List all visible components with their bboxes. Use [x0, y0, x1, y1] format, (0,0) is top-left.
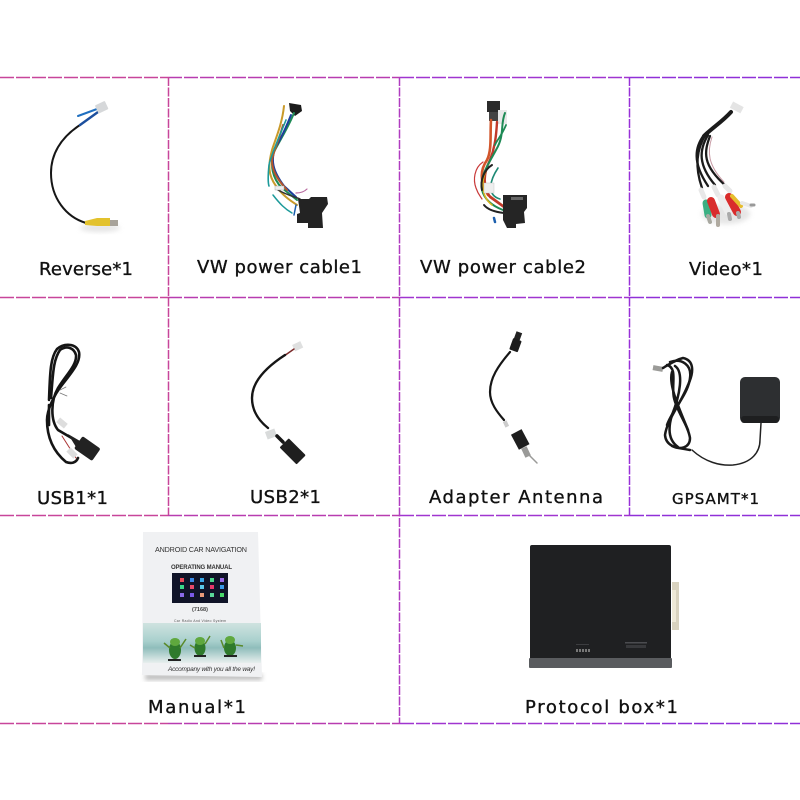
icon: VW power cable 1: [268, 103, 328, 228]
label: Reverse*1: Reverse*1: [39, 259, 133, 280]
label: VW power cable1: VW power cable1: [197, 257, 362, 278]
icon: GPS antenna: [653, 358, 780, 465]
icon: USB2 cable: [252, 341, 306, 464]
icon: manual booklet: ANDROID CAR NAVIGATION: [155, 545, 247, 554]
icon: manual booklet: [142, 532, 262, 680]
panel: USB1: [37, 345, 108, 509]
icon: manual booklet: OPERATING MANUAL: [171, 565, 232, 571]
panel: video cable: [689, 102, 763, 280]
icon: protocol box: [529, 545, 679, 668]
icon: VW power cable 2: [474, 101, 527, 228]
panel: GPS antenna: [653, 358, 780, 508]
panel: VW power cable 1: [197, 103, 362, 278]
panel: adapter antenna: [429, 331, 603, 508]
label: USB2*1: USB2*1: [250, 487, 321, 508]
panel: USB2: [250, 341, 321, 508]
label: Manual*1: Manual*1: [148, 697, 246, 718]
panel: protocol box: [525, 545, 679, 718]
label: VW power cable2: VW power cable2: [420, 257, 586, 278]
label: Adapter Antenna: Adapter Antenna: [429, 487, 603, 508]
icon: manual booklet: Car Radio And Video System: [174, 619, 226, 623]
panel: manual: [142, 532, 262, 718]
icon: adapter antenna: [490, 331, 537, 463]
label: Video*1: Video*1: [689, 259, 763, 280]
icon: manual booklet: Accompany with you all the way!: [167, 666, 255, 673]
icon: USB1 cable: [47, 345, 101, 463]
panel: reverse cable: [39, 101, 133, 280]
panel: VW power cable 2: [420, 101, 586, 278]
icon: manual booklet: (7168): [192, 607, 208, 613]
icon: reverse cable: [51, 101, 120, 232]
label: USB1*1: USB1*1: [37, 488, 108, 509]
icon: video RCA cable: [697, 102, 754, 225]
label: GPSAMT*1: GPSAMT*1: [672, 490, 759, 508]
label: Protocol box*1: Protocol box*1: [525, 697, 678, 718]
